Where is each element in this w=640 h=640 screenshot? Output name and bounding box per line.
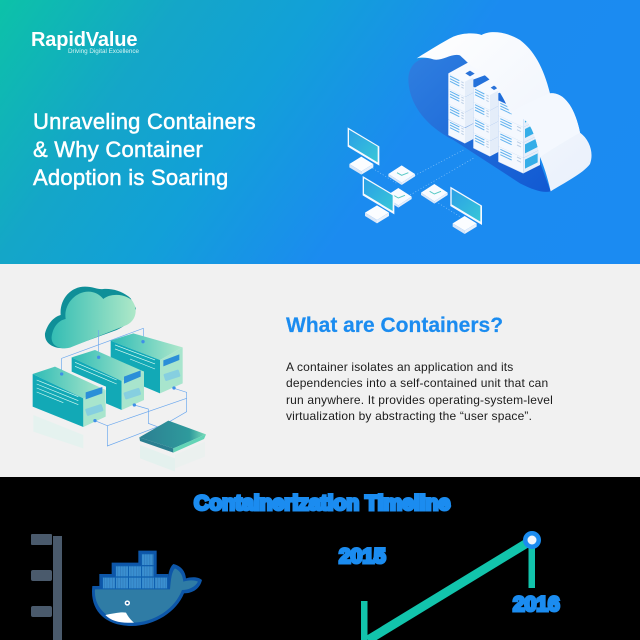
icon: network nodes: [385, 165, 448, 208]
text block: container definition: A container isolates an application and its: [286, 360, 513, 374]
panel: what are containers: [0, 264, 640, 477]
storage slab: [139, 421, 206, 453]
data links: [370, 150, 473, 217]
title: hero heading: Unraveling Containers: [33, 109, 256, 134]
logo: RapidValue: RapidValue: [31, 29, 137, 51]
text block: container definition: virtualization by abstracting the “user space”.: [286, 409, 532, 423]
text block: container definition: [286, 360, 553, 423]
axis: vertical timeline bar: [31, 534, 62, 640]
server racks: [448, 62, 540, 173]
panel: containerization timeline: [0, 477, 640, 640]
heading: what are containers: What are Containers?: [286, 314, 503, 337]
server B: [72, 350, 176, 410]
server A: [33, 367, 106, 427]
panel: hero banner: [0, 0, 640, 264]
heading: containerization timeline: Containerization Timeline: [194, 492, 450, 515]
title: hero heading: Adoption is Soaring: [33, 165, 229, 190]
wiring: [62, 328, 187, 446]
cloud interior: [408, 55, 551, 192]
logo: RapidValue: Driving Digital Excellence: [68, 48, 139, 55]
text block: container definition: run anywhere. It provides operating-system-level: [286, 393, 553, 407]
title: hero heading: [32, 109, 256, 190]
marker: [523, 531, 541, 549]
label: year 2016: 2016: [513, 593, 560, 616]
label: year 2015: 2015: [339, 545, 386, 568]
text block: container definition: dependencies into a self-contained unit that can: [286, 376, 548, 390]
chart: container adoption line: [361, 531, 541, 640]
icon: monitors: [348, 127, 482, 234]
cloud outer band: [417, 32, 592, 191]
green cloud: [45, 287, 136, 348]
title: hero heading: & Why Container: [33, 137, 203, 162]
illustration: green cloud and storage: [33, 287, 206, 472]
reflections: [33, 415, 205, 472]
icon: docker whale: [92, 551, 202, 626]
server C: [111, 333, 183, 393]
illustration: cloud with servers and monitors: [348, 32, 592, 234]
